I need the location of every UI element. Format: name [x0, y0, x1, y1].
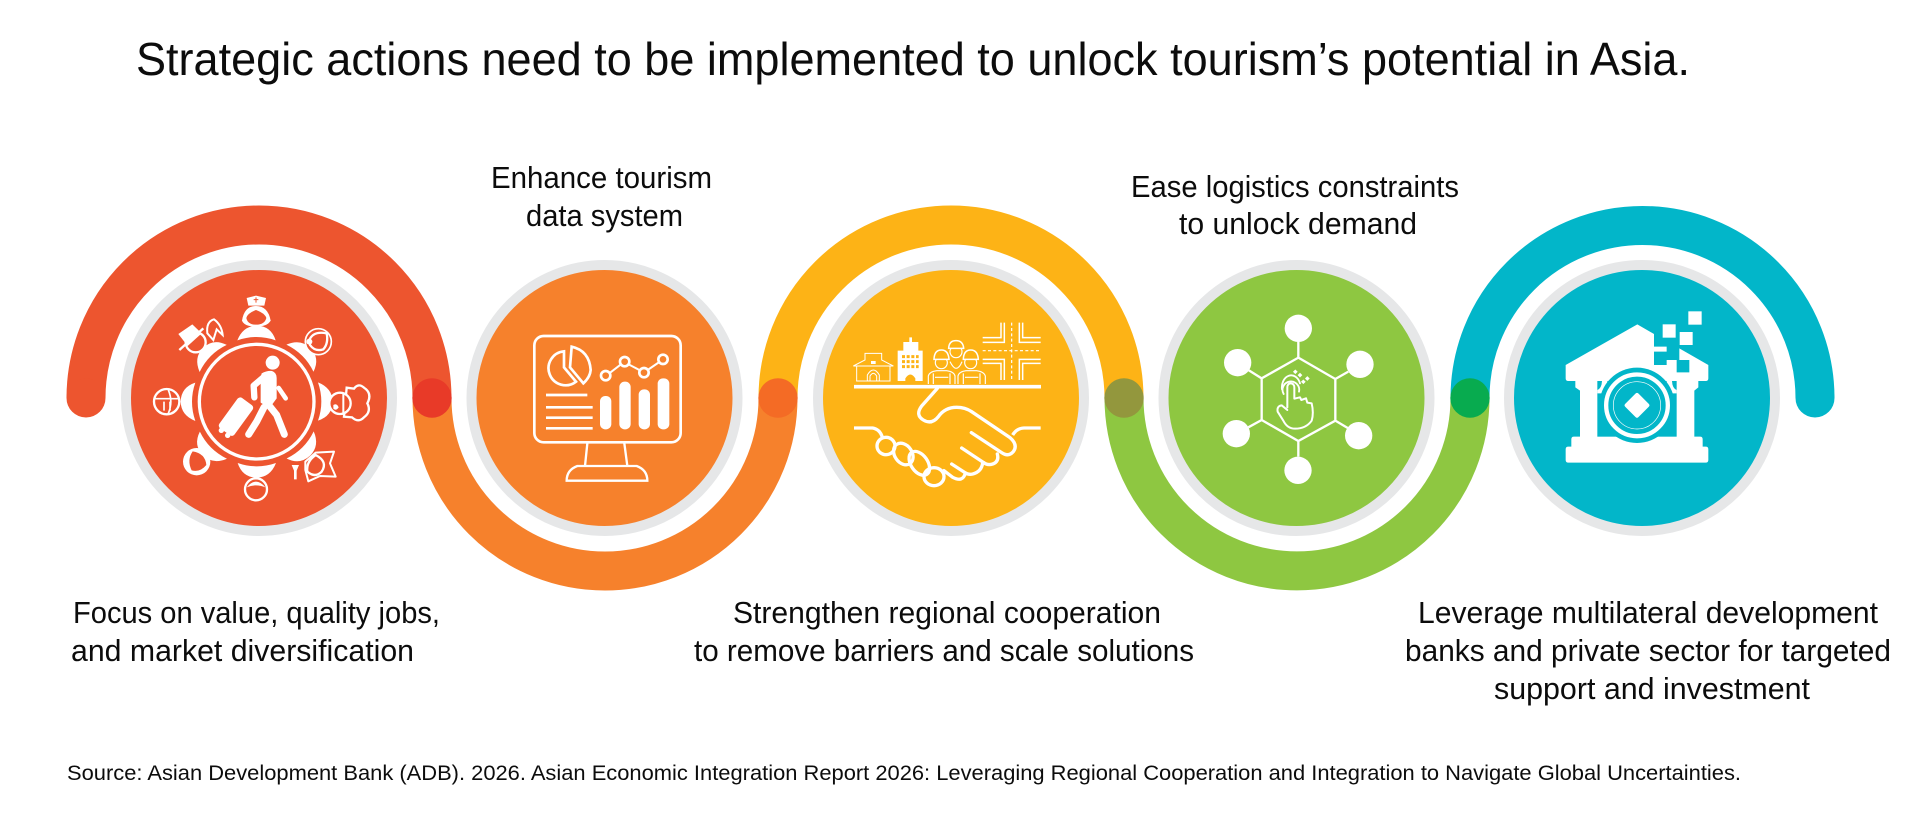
label: strengthen regional cooperation: to remove barriers and scale solutions: [694, 633, 1194, 668]
head: [266, 356, 280, 370]
arc: red: [86, 225, 432, 398]
icon: traveller surrounded by tourism workers: [154, 296, 369, 500]
icon: digital bank: [1566, 311, 1708, 463]
label: focus on value: and market diversification: [71, 633, 414, 668]
leaf hat worker: [305, 452, 336, 481]
title: Strategic actions need to be implemented to unlock tourism’s potential in Asia.: [136, 33, 1690, 85]
panel: circle 2 data system: [472, 265, 738, 531]
helmet worker: [154, 389, 179, 414]
label: leverage multilateral development banks: [1405, 595, 1891, 706]
label: focus on value: Focus on value, quality jobs,: [73, 595, 440, 630]
icon: hexagon network with touch hand: [1223, 315, 1374, 484]
arc end cap: left: [66, 378, 106, 418]
source note: Source: Asian Development Bank (ADB). 2026. Asian Economic Integration Report 2026: Leveraging Regional Cooperation and Integration to Navigate Global Uncertainties.: [67, 762, 1741, 785]
connector ribbon: five alternating arcs: [66, 225, 1834, 571]
dot: orange junction: [758, 378, 798, 418]
label: strengthen regional cooperation: Strengthen regional cooperation: [733, 595, 1161, 630]
dot: red junction: [412, 378, 452, 418]
label: leverage multilateral development banks: support and investment: [1494, 671, 1810, 706]
panel: circle 1 value and jobs: [126, 265, 392, 531]
arc: green: [1124, 398, 1470, 571]
arc end cap: right: [1796, 378, 1834, 418]
label: ease logistics constraints: to unlock demand: [1179, 206, 1417, 241]
label: ease logistics constraints: [1131, 169, 1459, 241]
busts around ring: [181, 326, 333, 478]
nurse: [247, 296, 266, 306]
arc: yellow: [778, 225, 1124, 398]
chef: [344, 385, 369, 420]
panel: circle 3 regional cooperation: [818, 265, 1084, 531]
shelf: [854, 381, 1041, 392]
label: focus on value: [71, 595, 440, 668]
bottom head: [245, 478, 267, 500]
label: leverage multilateral development banks: Leverage multilateral development: [1418, 595, 1878, 630]
label: strengthen regional cooperation: [694, 595, 1194, 668]
lower-left head: [183, 448, 210, 475]
handshake: [854, 388, 1041, 486]
label: enhance tourism data system: [491, 160, 712, 233]
arc: orange: [432, 398, 778, 571]
panel: circle 5 investment: [1509, 265, 1775, 531]
icon: buildings, workers, roads and handshake: [853, 323, 1041, 486]
touch hand: [1277, 369, 1313, 429]
headset worker: [305, 329, 331, 355]
junction dots: [412, 378, 1490, 418]
label: ease logistics constraints: Ease logistics constraints: [1131, 169, 1459, 204]
dot: green junction: [1450, 378, 1490, 418]
suitcase: [217, 396, 255, 437]
road crossing: [983, 323, 1041, 380]
label: enhance tourism data system: Enhance tourism: [491, 160, 712, 195]
panel: circle 4 logistics: [1164, 265, 1430, 531]
dot: olive junction: [1104, 378, 1144, 418]
arc: cyan: [1470, 226, 1815, 398]
workers: [928, 346, 985, 384]
office tower: [898, 337, 923, 381]
building outline: [853, 353, 893, 381]
icon: dashboard monitor: [534, 336, 681, 481]
label: leverage multilateral development banks: banks and private sector for targeted: [1405, 633, 1891, 668]
graduate-hat worker: [186, 332, 206, 352]
label: enhance tourism data system: data system: [526, 198, 683, 233]
